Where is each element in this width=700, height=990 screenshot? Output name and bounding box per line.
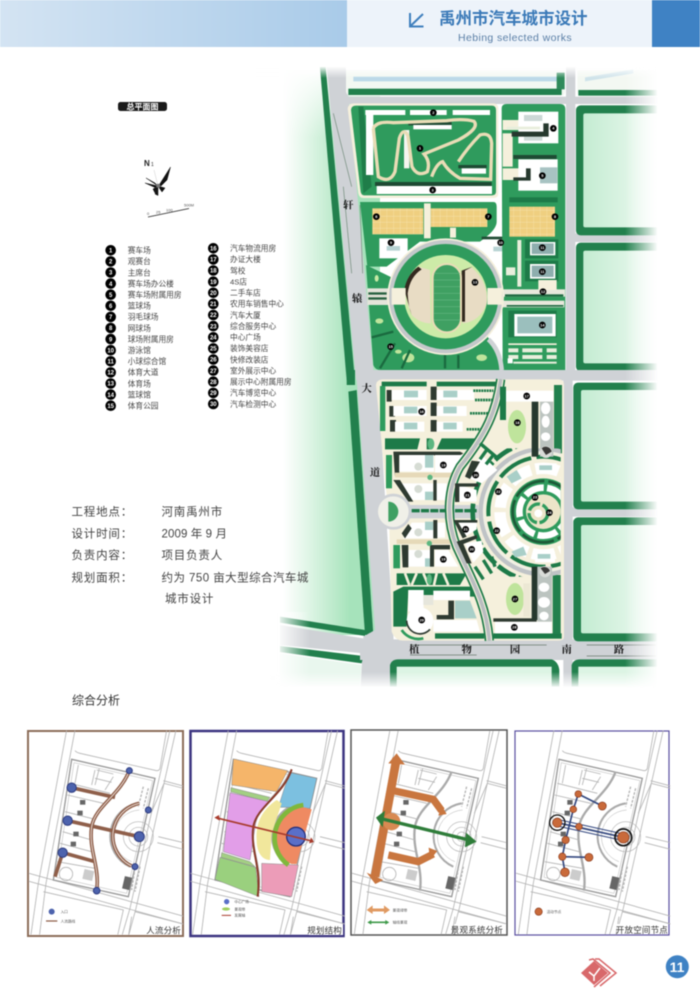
plan markers: 2: [432, 110, 435, 115]
legend column 1: 9: [109, 337, 113, 343]
legend column 1: 13: [107, 382, 115, 388]
legend column 1: 2: [109, 260, 113, 266]
racetrack block: [348, 103, 498, 198]
legend: 景观带: [234, 906, 246, 911]
legend column 1: [105, 245, 182, 411]
plan markers: 5: [541, 173, 544, 178]
project information: 河南禹州市: [162, 505, 223, 519]
caption: 景观系统分析: [451, 925, 503, 935]
legend column 1: 5: [109, 293, 113, 299]
legend column 2: 29: [210, 391, 217, 397]
plan markers: 10: [498, 240, 504, 245]
legend column 1: 观赛台: [128, 256, 151, 266]
lower site plan: 道: [370, 466, 381, 479]
panel: landscape system: [350, 730, 508, 937]
lower site plan: 南: [561, 643, 572, 656]
caption: 人流分析: [146, 926, 181, 936]
legend column 1: 6: [109, 304, 113, 310]
header band: [0, 0, 700, 47]
icon: footer logo: [581, 959, 616, 987]
legend column 1: 11: [108, 360, 115, 366]
S-curve main avenue: [449, 379, 501, 641]
plan markers: 24: [547, 510, 552, 515]
east half of the site: [451, 379, 564, 641]
plan markers: 21: [463, 527, 469, 532]
upper site plan: 辕: [352, 292, 363, 305]
plan markers: 8: [554, 214, 557, 219]
plan markers: 27: [513, 596, 518, 601]
legend column 2: 二手车店: [230, 288, 261, 298]
legend column 1: 赛车场: [128, 245, 151, 255]
plan markers: 19: [441, 462, 446, 467]
legend column 2: 汽车物流用房: [230, 243, 276, 253]
legend: 中心广场: [234, 899, 249, 904]
canal block: [346, 70, 565, 96]
project information: 项目负责人: [162, 548, 223, 562]
legend column 1: 篮球馆: [128, 389, 151, 399]
icon: north compass and scale: 25: [156, 210, 161, 214]
legend column 2: 快修改装店: [230, 354, 269, 364]
project information: 城市设计: [165, 591, 214, 605]
legend column 1: 游泳馆: [128, 345, 151, 355]
legend column 2: 20: [210, 291, 217, 297]
sports park: [366, 265, 500, 370]
legend: [367, 905, 408, 925]
plan markers: [418, 393, 553, 631]
legend column 1: 球场附属用房: [128, 334, 174, 344]
legend column 1: 篮球场: [128, 301, 151, 311]
secondary landscape axis: [380, 818, 472, 841]
legend column 2: 28: [210, 380, 217, 386]
plan markers: 22: [494, 528, 500, 533]
entrance nodes: [58, 768, 151, 894]
legend column 2: 展示中心附属用房: [230, 376, 292, 386]
icon: north compass and scale: 0: [147, 211, 150, 216]
plan markers: 28: [512, 625, 517, 630]
panel: planning structure: [188, 730, 347, 937]
legend: 发展轴: [234, 913, 246, 918]
legend: 景观绿带: [393, 907, 408, 912]
legend column 2: 汽车检测中心: [230, 399, 276, 409]
legend: 活动节点: [547, 909, 562, 914]
panel: open space nodes: [514, 730, 672, 937]
legend column 2: 综合服务中心: [230, 321, 276, 331]
legend column 2: 16: [210, 246, 217, 252]
legend: 入口: [61, 909, 68, 914]
plan markers: 15: [388, 344, 394, 349]
project information: 设计时间：: [72, 527, 133, 540]
east lawns: [576, 105, 660, 235]
legend column 2: 驾校: [230, 265, 246, 275]
legend: [46, 909, 76, 923]
central core: [273, 807, 312, 864]
legend column 2: 4S店: [230, 276, 247, 286]
legend column 2: 21: [210, 302, 217, 308]
west half of the site: [376, 379, 500, 641]
legend column 2: 汽车博览中心: [230, 388, 276, 398]
plan markers: [373, 109, 558, 350]
plan markers: 29: [419, 617, 425, 622]
heading: analysis: 综合分析: [72, 692, 120, 708]
legend column 1: 1: [109, 248, 113, 254]
title: 禹州市汽车城市设计: [439, 8, 588, 28]
legend column 2: 30: [210, 402, 217, 408]
east column: [502, 104, 565, 370]
legend: [222, 899, 249, 918]
icon: north compass and scale: 100: [166, 208, 173, 212]
panel: pedestrian flow: [27, 730, 185, 937]
legend column 1: 8: [109, 326, 113, 332]
legend column 2: 装饰美容店: [230, 343, 269, 353]
legend column 1: 4: [109, 282, 113, 288]
structure axes: [253, 769, 292, 897]
heading: master plan pill: [118, 102, 167, 112]
radial central complex: [470, 448, 562, 578]
plan markers: 17: [524, 393, 530, 398]
plan markers: 13: [473, 280, 478, 285]
subtitle: Hebing selected works: [458, 32, 572, 44]
plan markers: 14: [540, 322, 545, 327]
plan markers: 3: [432, 187, 435, 192]
legend column 2: 25: [210, 347, 217, 353]
legend column 1: 赛车场办公楼: [128, 278, 174, 288]
west buildings: [386, 452, 466, 568]
east lawns: [573, 383, 660, 509]
race track: [373, 120, 492, 179]
map edge fades: [255, 47, 700, 699]
legend column 1: 网球场: [128, 323, 151, 333]
lower site plan: 物: [462, 643, 473, 656]
legend column 1: 体育公园: [128, 400, 159, 410]
nodes: [550, 791, 632, 877]
plan markers: 20: [469, 547, 475, 552]
pedestrian routes: [55, 771, 139, 891]
hedge wedges: [385, 438, 480, 449]
plan markers: 12: [541, 289, 546, 294]
east south lot: [493, 566, 552, 633]
project information: 负责内容：: [72, 548, 133, 562]
hedges: [382, 382, 427, 386]
legend column 2: 18: [210, 269, 217, 275]
stadium: [388, 239, 503, 354]
plan markers: 21: [465, 492, 470, 497]
legend column 1: 体育大道: [128, 367, 159, 377]
heading: master plan pill: 总平面图: [126, 102, 158, 112]
connecting corridors: [561, 794, 618, 869]
legend column 1: 7: [109, 315, 113, 321]
legend column 2: 17: [210, 258, 217, 264]
icon: north compass and scale: N: [144, 159, 150, 168]
entrance plaza: [377, 495, 410, 528]
fan-shaped blocks: [453, 443, 557, 579]
project information: 约为 750 亩大型综合汽车城: [162, 570, 309, 584]
legend column 1: 12: [107, 371, 115, 377]
yellow belt: [257, 800, 282, 860]
plan markers: 22: [496, 489, 501, 494]
project information: 工程地点：: [72, 506, 133, 519]
axis road: [410, 505, 478, 518]
legend column 1: 体育场: [128, 378, 151, 388]
plan markers: 19: [441, 557, 446, 562]
project information: 规划面积：: [72, 570, 133, 584]
legend column 2: 办证大楼: [230, 254, 261, 264]
legend column 2: 19: [210, 280, 217, 286]
south lawns: [390, 659, 559, 687]
plan markers: 7: [487, 214, 490, 219]
legend column 2: 室外展示中心: [230, 365, 276, 375]
left green glow beside the master plan: [280, 68, 380, 635]
caption: 开放空间节点: [616, 925, 668, 935]
lower site plan: 植: [409, 643, 420, 656]
lower site plan: [280, 370, 660, 687]
legend column 1: 羽毛球场: [128, 312, 159, 322]
plan markers: 18: [515, 420, 520, 425]
legend column 2: 24: [210, 336, 217, 342]
icon: north compass and scale: 1: [151, 162, 154, 168]
plan markers: 23: [533, 495, 538, 500]
icon: header arrow: [410, 13, 424, 26]
legend column 2: 23: [210, 324, 217, 330]
upper site plan: [319, 60, 660, 381]
page number badge: 11: [670, 959, 685, 975]
legend column 2: 汽车大厦: [230, 310, 261, 320]
legend: 轴线景观: [393, 920, 408, 925]
plan markers: 6: [375, 214, 378, 219]
plan markers: 20: [473, 472, 479, 477]
lower site plan: 路: [614, 643, 625, 656]
south-west roads: [280, 617, 365, 636]
function zones: [215, 759, 317, 897]
legend column 2: [208, 243, 292, 409]
road name labels: 大: [362, 382, 373, 395]
plan markers: 11: [540, 269, 545, 274]
page number badge: [666, 955, 689, 978]
icon: north compass and scale: 500M: [184, 202, 194, 208]
icon: north compass and scale: [144, 159, 194, 217]
legend column 1: 赛车场附属用房: [128, 290, 182, 300]
legend column 2: 22: [210, 313, 217, 319]
legend: 人流路线: [61, 918, 76, 923]
plan markers: 1: [419, 146, 422, 151]
primary landscape axis: [375, 758, 442, 877]
legend column 2: 27: [210, 369, 217, 375]
plan markers: 16: [419, 409, 425, 414]
legend column 1: 3: [109, 271, 113, 277]
project information: 2009 年 9 月: [162, 526, 227, 540]
south-west building group: [393, 587, 480, 639]
project information: [72, 505, 309, 605]
legend column 1: 主席台: [128, 267, 151, 277]
legend column 1: 14: [107, 393, 115, 399]
north row buildings: [387, 387, 493, 432]
legend column 1: 小球综合馆: [128, 356, 166, 366]
plan markers: 11: [540, 245, 545, 250]
legend column 2: 26: [210, 358, 217, 364]
road name labels: 轩: [343, 199, 354, 212]
court block north: [360, 202, 497, 267]
plan markers: 4: [552, 126, 555, 131]
east north lot: [500, 387, 553, 458]
legend column 2: 中心广场: [230, 332, 261, 342]
legend column 1: 10: [107, 348, 115, 354]
lower site plan: 园: [510, 644, 520, 656]
legend column 1: 15: [107, 404, 115, 410]
legend: [535, 908, 562, 915]
master plan map: [280, 66, 656, 687]
plan markers: 9: [390, 240, 393, 245]
caption: 规划结构: [307, 926, 342, 936]
legend column 2: 农用车销售中心: [230, 299, 284, 309]
